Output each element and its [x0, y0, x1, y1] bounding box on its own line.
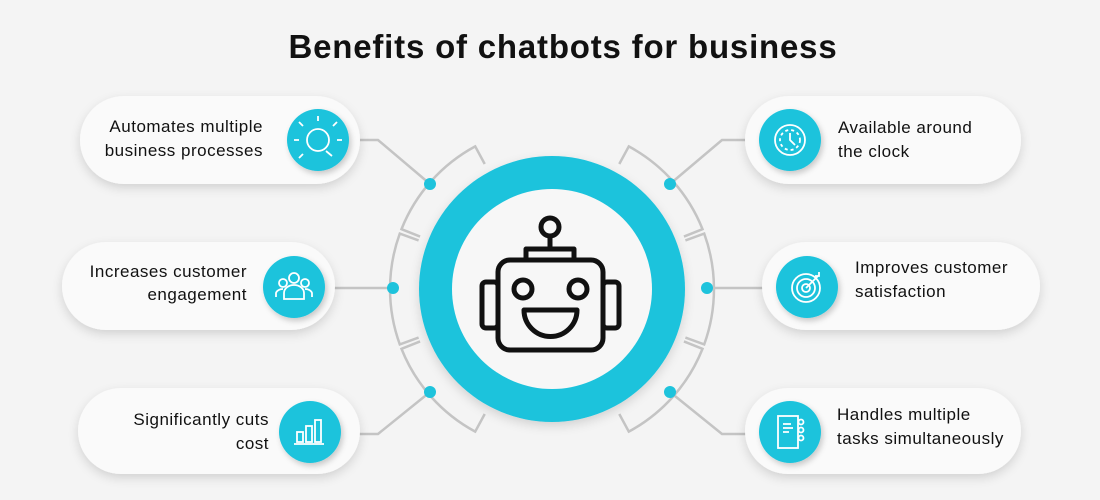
- pill: satisfaction: Improves customer: [855, 258, 1008, 277]
- pill: available: the clock: [838, 142, 910, 161]
- pill: tasks: Handles multiple: [837, 405, 971, 424]
- pill: cost: cost: [236, 434, 269, 453]
- pill: tasks: tasks simultaneously: [837, 429, 1004, 448]
- pill: engagement: [62, 242, 335, 330]
- pill: tasks: [745, 388, 1021, 474]
- pill: automates: business processes: [105, 141, 263, 160]
- pill: cost: [78, 388, 360, 474]
- pill: satisfaction: satisfaction: [855, 282, 946, 301]
- connector dots: [387, 178, 713, 398]
- pill: engagement: Increases customer: [90, 262, 247, 281]
- pill: satisfaction: [762, 242, 1040, 330]
- pill: available: [745, 96, 1021, 184]
- pill: engagement: engagement: [147, 285, 247, 304]
- icon: robot: [482, 218, 619, 350]
- pill: automates: Automates multiple: [109, 117, 263, 136]
- central robot circle: [419, 156, 685, 422]
- title: Benefits of chatbots for business: [289, 28, 837, 65]
- pill: cost: Significantly cuts: [133, 410, 269, 429]
- pill: available: Available around: [838, 118, 972, 137]
- pill: automates: [80, 96, 360, 184]
